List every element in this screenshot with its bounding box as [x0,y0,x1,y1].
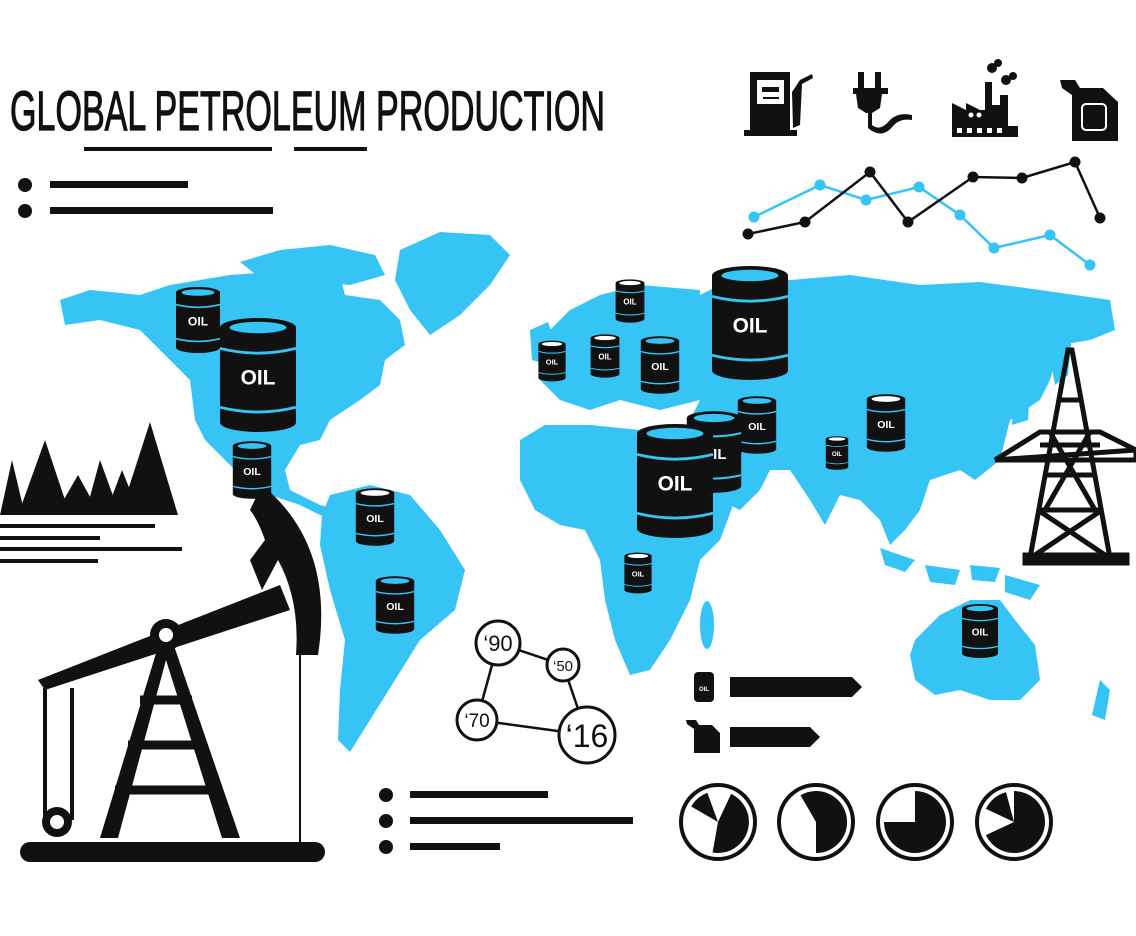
barrel: uk: OIL [546,357,559,366]
timeline circles: ‘16 [566,718,608,754]
line chart [742,156,1106,270]
map: asia [690,275,1115,545]
barrel: saudi arabia: OIL [658,473,693,495]
map: arctic islands [240,245,385,285]
barrel: india: OIL [832,451,842,458]
barrel: east europe [641,336,679,394]
barrel: east europe: OIL [651,361,669,373]
map: north america [60,270,405,520]
barrel: china: OIL [877,419,895,431]
barrel: iran [687,411,741,493]
barrel: russia: OIL [733,315,768,337]
barrel: usa [220,318,296,432]
barrel: africa: OIL [632,569,645,578]
barrel: saudi arabia [637,424,713,538]
map: kamchatka [1045,330,1072,385]
barrel: europe: OIL [598,353,612,362]
timeline circles: ‘50 [553,658,573,675]
icon: fuel pump [744,72,813,136]
barrel: uk [538,341,566,381]
map: madagascar [700,601,714,649]
title: GLOBAL PETROLEUM PRODUCTION [10,79,605,142]
mountain chart [0,422,182,563]
icon: small jerrycan [686,720,720,753]
barrel: usa: OIL [241,367,276,389]
barrel: venezuela [356,488,394,546]
barrel: mexico [233,441,271,499]
barrel: norway: OIL [623,298,637,307]
title underlines [84,147,367,151]
barrel: alaska [176,287,220,353]
bar indicators [686,672,862,753]
icon: small barrel: OIL [699,687,709,693]
map: japan [1012,378,1030,425]
power tower [995,350,1136,563]
icon: factory [952,59,1018,137]
barrel: australia [962,604,998,658]
barrel: russia [712,266,788,380]
barrel: alaska: OIL [188,314,209,328]
barrel: africa [624,553,652,593]
legend top left [18,178,273,218]
map: uk [530,322,556,365]
icon: plug [853,72,912,134]
icon: small barrel [694,672,714,702]
barrels [176,266,998,658]
timeline circles: ‘70 [464,711,490,732]
timeline circles: ‘90 [483,631,513,656]
barrel: australia: OIL [972,628,988,638]
barrel: brazil [376,576,414,634]
barrel: kazakhstan [738,396,776,454]
icon: jerrycan [1060,80,1118,141]
map: europe [540,285,700,410]
timeline circles [457,621,615,763]
world map [60,232,1115,752]
map: australia [910,600,1040,700]
barrel: china [867,394,905,452]
map: indonesia [880,548,1040,600]
barrel: mexico: OIL [243,466,261,478]
barrel: europe [591,334,619,378]
map: new zealand [1092,680,1110,720]
barrel: norway [616,279,644,323]
barrel: brazil: OIL [386,601,404,613]
barrel: venezuela: OIL [366,513,384,525]
bottom list [379,788,633,854]
map: greenland [395,232,510,335]
map: south america [320,485,465,752]
barrel: kazakhstan: OIL [748,421,766,433]
map: africa [520,425,735,675]
barrel: india [826,436,848,470]
barrel: iran: OIL [702,446,726,463]
pump jack [20,485,325,862]
pie charts [681,785,1051,859]
